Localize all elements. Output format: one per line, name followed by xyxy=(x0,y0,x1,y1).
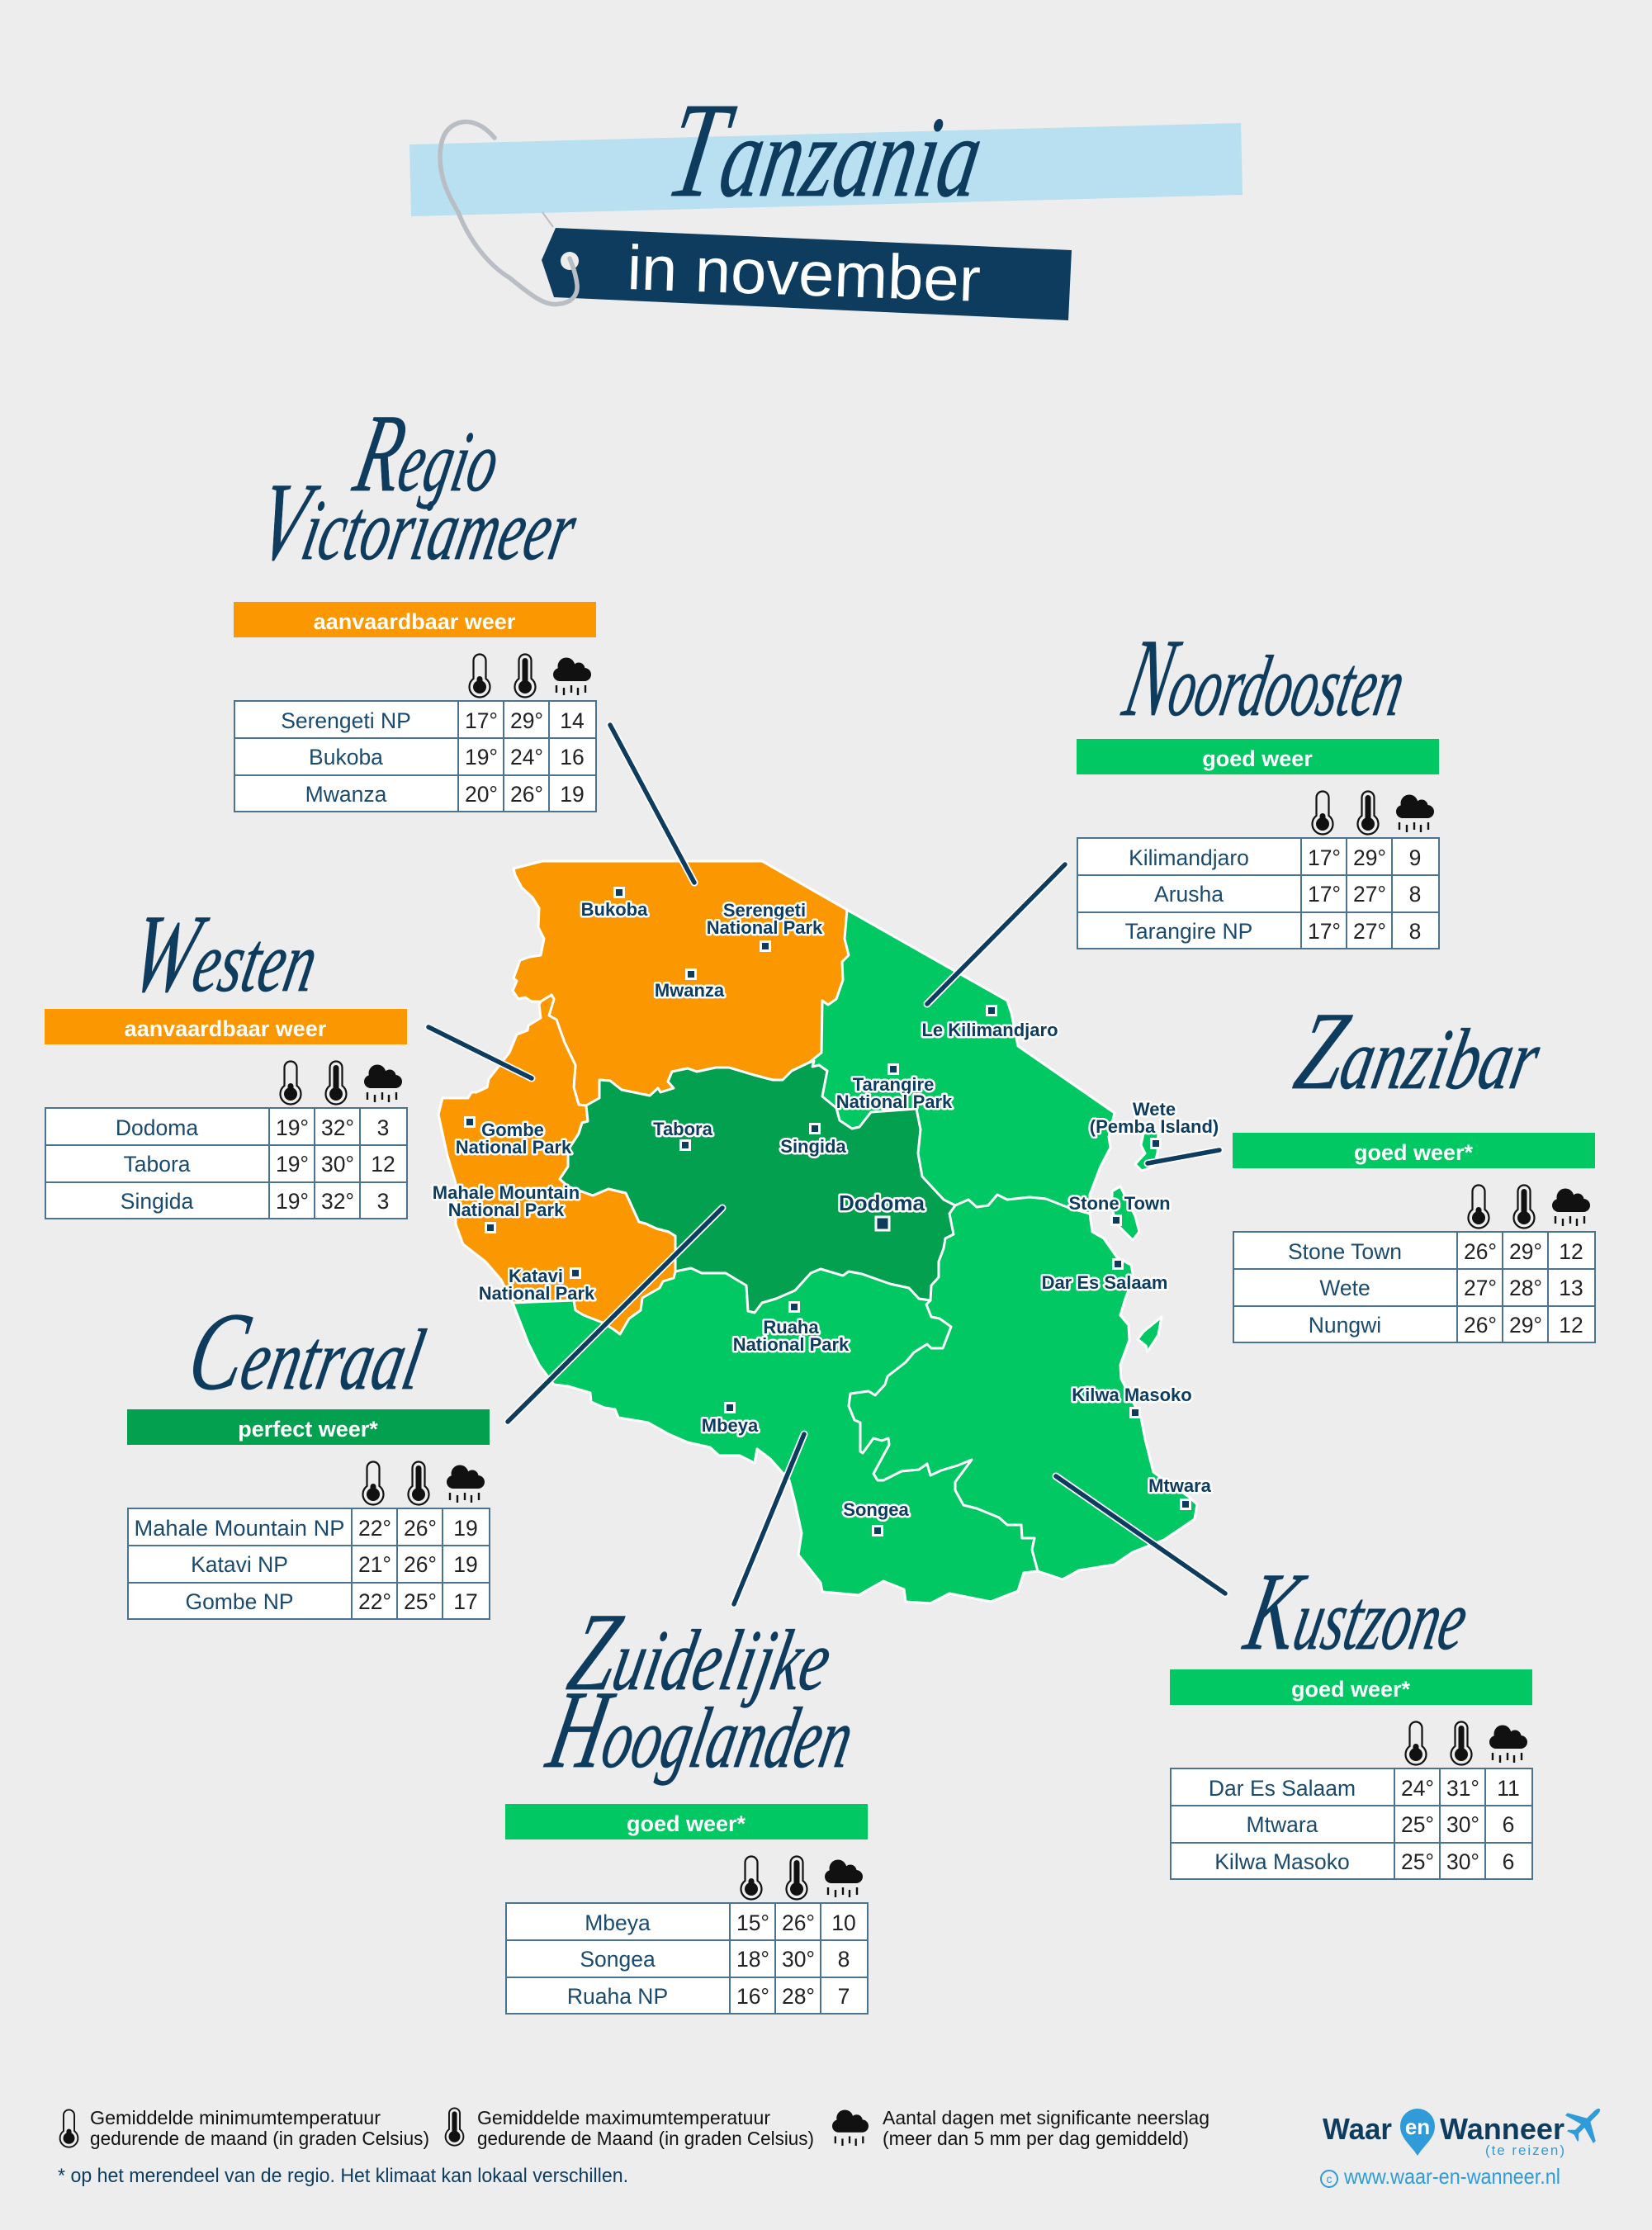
heading: Zuidelijke Hooglanden xyxy=(537,1589,867,1792)
logo wordmark left: Waar xyxy=(1323,2112,1392,2146)
table: Kustzone: 11 xyxy=(1497,1776,1520,1801)
table: Zuidelijke Hooglanden: Ruaha NP xyxy=(567,1984,668,2009)
table: Westen: 12 xyxy=(371,1152,395,1177)
table: Victoriameer: 17° xyxy=(465,708,498,733)
city: Bukoba xyxy=(581,888,648,920)
table: Zuidelijke Hooglanden: 18° xyxy=(736,1947,769,1972)
icons: min temp, max temp, rain xyxy=(281,1062,402,1105)
heading: Noordoosten: Noordoosten xyxy=(1115,615,1418,740)
line: Zuidelijke Hooglanden xyxy=(734,1434,804,1604)
city: Mwanza: Mwanza xyxy=(655,980,725,1001)
table: Kustzone xyxy=(1171,1768,1532,1879)
city: Singida: Singida xyxy=(780,1136,846,1157)
subtitle: in november: in november xyxy=(626,233,982,315)
table: Westen: 32° xyxy=(321,1189,354,1214)
table: Noordoosten: 17° xyxy=(1308,882,1341,907)
banner: aanvaardbaar weer: aanvaardbaar weer xyxy=(125,1016,327,1041)
banner: goed weer*: goed weer* xyxy=(1354,1140,1474,1165)
banner: goed weer: goed weer xyxy=(1202,746,1313,771)
city: Songea: Songea xyxy=(843,1499,909,1520)
region: Centraal (dark green) xyxy=(560,1061,955,1313)
line: Noordoosten xyxy=(927,864,1065,1004)
table: Kustzone: Mtwara xyxy=(1247,1812,1318,1837)
table: Centraal: 25° xyxy=(404,1589,437,1614)
title block xyxy=(409,74,1243,320)
city: Dar Es Salaam xyxy=(1042,1260,1167,1293)
table: Zuidelijke Hooglanden: 28° xyxy=(782,1984,815,2009)
banner and table block xyxy=(505,1804,868,2014)
light blue title band xyxy=(409,123,1243,216)
table: Centraal: 19 xyxy=(453,1552,478,1577)
banner: goed weer*: goed weer* xyxy=(1291,1677,1411,1702)
banner: goed weer* xyxy=(1233,1133,1595,1168)
line: Kustzone xyxy=(1056,1476,1225,1593)
legend: maximum temperature xyxy=(446,2107,814,2149)
city: Gombe National Park: Gombe xyxy=(481,1120,544,1140)
table: Zanzibar: Wete xyxy=(1319,1276,1370,1300)
city: Kilwa Masoko xyxy=(1072,1385,1192,1417)
table: Noordoosten: Kilimandjaro xyxy=(1129,845,1249,870)
city: Bukoba: Bukoba xyxy=(581,899,648,920)
icon: airplane xyxy=(1558,2095,1614,2151)
table: Centraal: 17 xyxy=(453,1589,478,1614)
city: Serengeti National Park: National Park xyxy=(707,917,823,938)
table: Westen xyxy=(45,1108,407,1219)
table: Zuidelijke Hooglanden: Songea xyxy=(580,1947,656,1972)
city: Mtwara xyxy=(1148,1475,1212,1509)
banner: goed weer* xyxy=(1170,1669,1532,1705)
table: Zanzibar: 12 xyxy=(1559,1313,1583,1338)
panel: Zuidelijke Hooglanden xyxy=(505,1589,868,2014)
table: Victoriameer: 14 xyxy=(560,708,585,733)
banner: aanvaardbaar weer xyxy=(234,602,596,637)
logo tagline: (te reizen) xyxy=(1485,2142,1564,2158)
table: Kustzone: Kilwa Masoko xyxy=(1214,1849,1350,1874)
table: Zanzibar: 13 xyxy=(1559,1276,1583,1300)
legend xyxy=(58,2107,1209,2187)
table: Victoriameer xyxy=(234,701,596,812)
thin string behind tag xyxy=(542,212,553,227)
table: Kustzone: 31° xyxy=(1446,1776,1479,1801)
city: Tabora: Tabora xyxy=(653,1119,713,1139)
table: Kustzone: 24° xyxy=(1401,1776,1434,1801)
banner: aanvaardbaar weer: aanvaardbaar weer xyxy=(314,609,516,634)
city: Serengeti National Park: Serengeti xyxy=(723,900,806,921)
table: Victoriameer: 19° xyxy=(465,745,498,769)
city markers and labels xyxy=(433,888,1219,1536)
heading: Regio Victoriameer: Regio xyxy=(345,391,513,515)
legend: minimum temperature xyxy=(60,2107,429,2149)
city: Stone Town: Stone Town xyxy=(1068,1193,1171,1214)
table: Centraal: 19 xyxy=(453,1516,478,1541)
city: Kilwa Masoko: Kilwa Masoko xyxy=(1072,1385,1192,1405)
table: Noordoosten: Tarangire NP xyxy=(1125,919,1252,944)
city: Stone Town xyxy=(1068,1193,1171,1225)
banner: goed weer xyxy=(1077,739,1439,774)
table: Centraal: Mahale Mountain NP xyxy=(134,1516,345,1541)
table: Zuidelijke Hooglanden: 8 xyxy=(838,1947,850,1972)
table: Westen: Dodoma xyxy=(116,1115,198,1140)
boundary: Zuidelijke Hooglanden and Kustzone xyxy=(849,1300,1038,1571)
city: Dodoma: Dodoma xyxy=(839,1191,925,1215)
city: Katavi National Park: Katavi xyxy=(509,1266,563,1286)
logo wordmark right: Wanneer xyxy=(1440,2112,1564,2146)
heading: Zanzibar: Zanzibar xyxy=(1286,988,1553,1113)
table: Zanzibar: Stone Town xyxy=(1288,1239,1402,1264)
table: Zanzibar: 26° xyxy=(1464,1313,1497,1338)
table: Centraal: Gombe NP xyxy=(185,1589,294,1614)
city: Katavi National Park xyxy=(479,1266,595,1304)
table: Westen: 3 xyxy=(377,1189,389,1214)
city: Wete xyxy=(1090,1099,1219,1148)
city: Singida xyxy=(780,1124,846,1157)
banner and table block xyxy=(45,1009,407,1219)
island: Zanzibar xyxy=(1112,1186,1139,1240)
table: Victoriameer: Bukoba xyxy=(309,745,383,769)
city: Gombe National Park xyxy=(456,1118,572,1158)
city: Dodoma xyxy=(839,1191,925,1230)
table: Westen: Singida xyxy=(121,1189,193,1214)
icons: min temp, max temp, rain xyxy=(1405,1722,1527,1765)
panel: Zanzibar xyxy=(1233,988,1595,1342)
panel: Westen xyxy=(45,891,407,1219)
line: Westen xyxy=(428,1027,532,1078)
banner and table block xyxy=(234,602,596,812)
table: Kustzone: 6 xyxy=(1503,1812,1514,1837)
table: Zanzibar: 12 xyxy=(1559,1239,1583,1264)
table: Centraal: 22° xyxy=(358,1516,391,1541)
city: Mwanza xyxy=(655,969,725,1001)
table: Victoriameer: 26° xyxy=(510,782,543,807)
table: Centraal xyxy=(128,1508,490,1619)
table: Westen: 30° xyxy=(321,1152,354,1177)
table: Noordoosten: 8 xyxy=(1409,919,1421,944)
heading: Zuidelijke Hooglanden: Hooglanden xyxy=(537,1667,867,1792)
table: Noordoosten: 27° xyxy=(1353,919,1386,944)
table: Zanzibar: 26° xyxy=(1464,1239,1497,1264)
banner and table block xyxy=(1233,1133,1595,1342)
panel: Regio Victoriameer xyxy=(234,391,596,812)
logo: Waar en Wanneer xyxy=(1321,2095,1614,2189)
table: Noordoosten: 17° xyxy=(1308,919,1341,944)
city: Mahale Mountain National Park xyxy=(433,1182,580,1232)
logo pin xyxy=(1400,2109,1435,2156)
region: Victoriameer (orange) xyxy=(513,861,849,1106)
city: Mbeya xyxy=(702,1404,759,1436)
table: Victoriameer: Serengeti NP xyxy=(281,708,411,733)
city: Katavi National Park: National Park xyxy=(479,1283,595,1304)
table: Noordoosten: 27° xyxy=(1353,882,1386,907)
table: Westen: 19° xyxy=(276,1189,309,1214)
icons: min temp, max temp, rain xyxy=(1468,1186,1590,1229)
region: Westen (orange) xyxy=(438,995,675,1334)
table: Zanzibar: 28° xyxy=(1509,1276,1542,1300)
dark blue tag xyxy=(542,228,1072,320)
panel: Kustzone xyxy=(1170,1549,1532,1879)
legend: rain days: (meer dan 5 mm per dag gemiddeld) xyxy=(883,2128,1189,2149)
table: Kustzone: 6 xyxy=(1503,1849,1514,1874)
table: Victoriameer: Mwanza xyxy=(305,782,387,807)
island: Mafia xyxy=(1138,1317,1162,1352)
table: Zuidelijke Hooglanden: 30° xyxy=(782,1947,815,1972)
city: Tabora xyxy=(653,1119,713,1149)
table: Zuidelijke Hooglanden: 7 xyxy=(838,1984,850,2009)
table: Westen: 32° xyxy=(321,1115,354,1140)
legend: rain days: Aantal dagen met significante neerslag xyxy=(883,2107,1209,2128)
table: Victoriameer: 19 xyxy=(560,782,585,807)
table: Noordoosten: 8 xyxy=(1409,882,1421,907)
banner and table block xyxy=(1170,1669,1532,1879)
legend: minimum temperature: Gemiddelde minimumtemperatuur xyxy=(90,2107,381,2128)
table: Centraal: 22° xyxy=(358,1589,391,1614)
table: Zanzibar: 29° xyxy=(1509,1313,1542,1338)
footnote: * op het merendeel van de regio. Het klimaat kan lokaal verschillen. xyxy=(58,2165,628,2187)
city: Tarangire National Park: Tarangire xyxy=(853,1074,934,1095)
logo pin: en xyxy=(1405,2114,1430,2139)
panel: Noordoosten xyxy=(1077,615,1439,949)
boundary: Noordoosten and Kustzone xyxy=(955,1195,1090,1214)
line: Zanzibar xyxy=(1148,1150,1219,1163)
heading: Centraal: Centraal xyxy=(179,1289,438,1413)
table: Victoriameer: 20° xyxy=(465,782,498,807)
copyright mark: c xyxy=(1326,2172,1332,2185)
legend: maximum temperature: Gemiddelde maximumtemperatuur xyxy=(477,2107,770,2128)
city: Mtwara: Mtwara xyxy=(1148,1475,1212,1496)
table: Victoriameer: 24° xyxy=(510,745,543,769)
city: Le Kilimandjaro: Le Kilimandjaro xyxy=(921,1020,1058,1040)
table: Kustzone: 25° xyxy=(1401,1812,1434,1837)
city: Gombe National Park: National Park xyxy=(456,1137,572,1158)
region: green land xyxy=(501,861,1197,1603)
city: Tarangire National Park: National Park xyxy=(836,1091,953,1112)
table: Victoriameer: 29° xyxy=(510,708,543,733)
table: Kustzone: Dar Es Salaam xyxy=(1209,1776,1356,1801)
city: Songea xyxy=(843,1499,909,1536)
table: Zuidelijke Hooglanden: Mbeya xyxy=(585,1910,651,1935)
table: Westen: 19° xyxy=(276,1115,309,1140)
city: Wete: Wete xyxy=(1133,1099,1176,1120)
table: Centraal: 26° xyxy=(404,1516,437,1541)
table: Noordoosten: Arusha xyxy=(1154,882,1224,907)
island: Pemba xyxy=(1135,1131,1158,1171)
table: Zanzibar: Nungwi xyxy=(1309,1313,1381,1338)
banner and table block xyxy=(1077,739,1439,949)
city: Mahale Mountain National Park: Mahale Mountain xyxy=(433,1182,580,1203)
copyright mark xyxy=(1321,2171,1337,2187)
banner and table block xyxy=(127,1409,490,1619)
table: Centraal: 21° xyxy=(358,1552,391,1577)
table: Centraal: 26° xyxy=(404,1552,437,1577)
table: Kustzone: 30° xyxy=(1446,1812,1479,1837)
gray string loop xyxy=(440,122,577,305)
heading: Regio Victoriameer xyxy=(249,391,589,584)
table: Victoriameer: 16 xyxy=(560,745,585,769)
heading: Zuidelijke Hooglanden: Zuidelijke xyxy=(560,1589,845,1714)
heading: Westen: Westen xyxy=(121,891,331,1016)
table: Kustzone: 30° xyxy=(1446,1849,1479,1874)
line: Centraal xyxy=(508,1208,722,1422)
table: Noordoosten: 17° xyxy=(1308,845,1341,870)
table: Kustzone: 25° xyxy=(1401,1849,1434,1874)
city: Mbeya: Mbeya xyxy=(702,1415,759,1436)
banner: perfect weer*: perfect weer* xyxy=(238,1417,378,1442)
table: Zuidelijke Hooglanden: 10 xyxy=(831,1910,856,1935)
banner: perfect weer* xyxy=(127,1409,490,1445)
table: Westen: Tabora xyxy=(123,1152,191,1177)
city: Dar Es Salaam: Dar Es Salaam xyxy=(1042,1272,1167,1293)
city: Serengeti National Park xyxy=(707,900,823,951)
table: Centraal: Katavi NP xyxy=(191,1552,288,1577)
city: Ruaha National Park: Ruaha xyxy=(763,1317,819,1338)
table: Zuidelijke Hooglanden: 16° xyxy=(736,1984,769,2009)
table: Noordoosten xyxy=(1077,838,1439,949)
city: Wete: (Pemba Island) xyxy=(1090,1116,1219,1137)
table: Westen: 19° xyxy=(276,1152,309,1177)
banner: aanvaardbaar weer xyxy=(45,1009,407,1044)
website url: www.waar-en-wanneer.nl xyxy=(1343,2164,1560,2189)
table: Zuidelijke Hooglanden: 26° xyxy=(782,1910,815,1935)
banner: goed weer*: goed weer* xyxy=(627,1811,746,1836)
icons: min temp, max temp, rain xyxy=(363,1461,485,1504)
title: Tanzania: Tanzania xyxy=(658,74,995,225)
legend: minimum temperature: gedurende de maand (in graden Celsius) xyxy=(90,2128,429,2149)
city: Le Kilimandjaro xyxy=(921,1006,1058,1040)
table: Westen: 3 xyxy=(377,1115,389,1140)
table: Noordoosten: 9 xyxy=(1409,845,1421,870)
tag hole xyxy=(561,252,579,270)
city: Tarangire National Park xyxy=(836,1065,953,1112)
city: Ruaha National Park xyxy=(733,1303,850,1355)
legend: rain days xyxy=(832,2107,1209,2149)
banner: goed weer* xyxy=(505,1804,868,1839)
table: Zanzibar xyxy=(1233,1232,1595,1342)
icons: min temp, max temp, rain xyxy=(1313,791,1434,834)
icons: min temp, max temp, rain xyxy=(469,654,591,697)
heading: Regio Victoriameer: Victoriameer xyxy=(249,459,589,584)
city: Mahale Mountain National Park: National Park xyxy=(448,1200,565,1220)
table: Zanzibar: 29° xyxy=(1509,1239,1542,1264)
heading: Kustzone: Kustzone xyxy=(1235,1549,1481,1674)
connector lines xyxy=(428,725,1225,1604)
legend: maximum temperature: gedurende de Maand (in graden Celsius) xyxy=(477,2128,814,2149)
table: Zuidelijke Hooglanden xyxy=(506,1903,868,2014)
line: Victoriameer xyxy=(610,725,694,883)
icons: min temp, max temp, rain xyxy=(741,1856,863,1899)
table: Zanzibar: 27° xyxy=(1464,1276,1497,1300)
city: Ruaha National Park: National Park xyxy=(733,1334,850,1355)
map of Tanzania xyxy=(438,861,1197,1603)
table: Noordoosten: 29° xyxy=(1353,845,1386,870)
table: Zuidelijke Hooglanden: 15° xyxy=(736,1910,769,1935)
panel: Centraal xyxy=(127,1289,490,1619)
